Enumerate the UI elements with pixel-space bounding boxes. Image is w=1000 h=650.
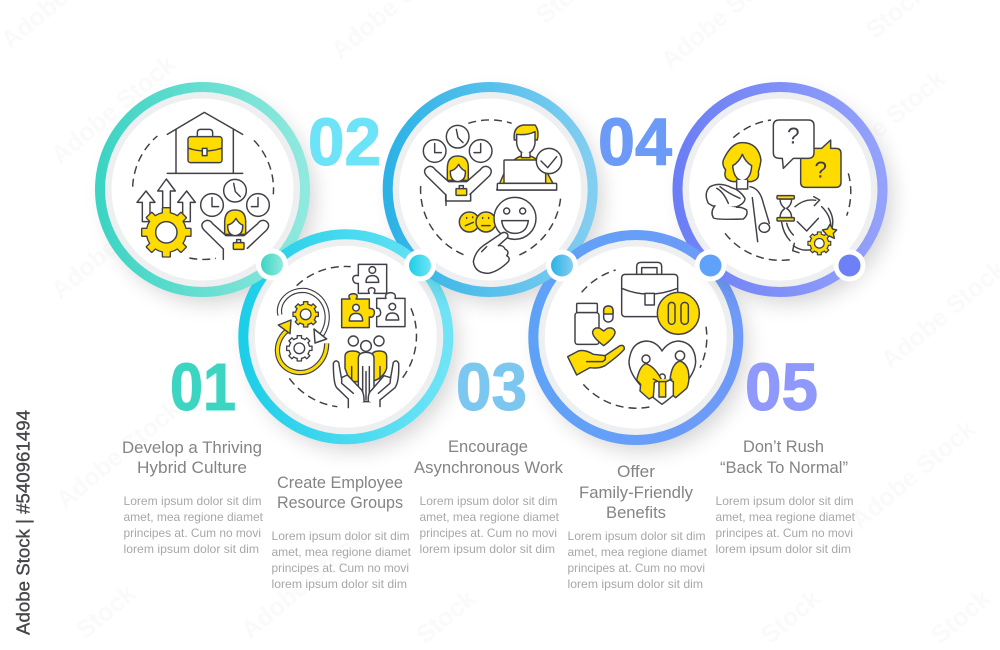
body text 5: principes at. Cum no movi (716, 526, 853, 540)
heading 4 (579, 462, 693, 522)
body text 2: amet, mea regione diamet (272, 545, 412, 559)
panel: circle 2 ring (243, 234, 457, 450)
panel: circle 5 ring (678, 87, 892, 303)
body text 2: principes at. Cum no movi (272, 561, 409, 575)
heading 4: Benefits (606, 503, 666, 522)
icon: back to normal (706, 120, 851, 260)
heading 5: Don’t Rush (743, 437, 824, 456)
stock id side label: Adobe Stock | #540961494 (14, 410, 34, 635)
body text 4 (568, 529, 708, 591)
body text 5 (716, 494, 856, 556)
body text 3: principes at. Cum no movi (420, 526, 557, 540)
heading 1: Hybrid Culture (137, 458, 247, 477)
heading 3 (414, 437, 563, 477)
body text 1: Lorem ipsum dolor sit dim (124, 494, 262, 508)
heading 2: Create Employee (277, 473, 403, 492)
connector dot 1 (256, 248, 288, 280)
heading 3: Encourage (448, 437, 528, 456)
body text 1: principes at. Cum no movi (124, 526, 261, 540)
body text 2 (272, 529, 412, 591)
heading 4: Family-Friendly (579, 483, 693, 502)
watermark pattern: Adobe Stock (816, 65, 951, 185)
heading 5 (720, 437, 848, 477)
connector dot 4 (694, 250, 726, 282)
watermark pattern: Adobe Stock (46, 50, 181, 170)
body text 4: principes at. Cum no movi (568, 561, 705, 575)
panel: circle 4 ring (533, 235, 747, 451)
body text 4: amet, mea regione diamet (568, 545, 708, 559)
heading 5: “Back To Normal” (720, 458, 848, 477)
body text 2: Lorem ipsum dolor sit dim (272, 529, 410, 543)
heading 4: Offer (617, 462, 655, 481)
icon: hybrid culture (133, 112, 274, 259)
icon: employee resource groups (277, 264, 417, 408)
panel: circle 1 ring (100, 87, 314, 303)
body text 2: lorem ipsum dolor sit dim (272, 577, 407, 591)
body text 4: lorem ipsum dolor sit dim (568, 577, 703, 591)
watermark pattern: Adobe Stock (51, 395, 186, 515)
body text 1: lorem ipsum dolor sit dim (124, 542, 259, 556)
connector dot 5 (834, 250, 866, 282)
panel: circle 3 ring (388, 87, 602, 303)
watermark pattern: Stock (756, 584, 826, 650)
number 03: 03 (456, 350, 527, 425)
heading 1 (122, 438, 262, 477)
body text 3: amet, mea regione diamet (420, 510, 560, 524)
heading 2: Resource Groups (277, 493, 403, 512)
heading 2 (277, 473, 403, 512)
watermark pattern: Stock (926, 584, 996, 650)
body text 4: Lorem ipsum dolor sit dim (568, 529, 706, 543)
body text 5: lorem ipsum dolor sit dim (716, 542, 851, 556)
body text 5: amet, mea regione diamet (716, 510, 856, 524)
body text 5: Lorem ipsum dolor sit dim (716, 494, 854, 508)
icon: back to normal: ? (814, 157, 827, 183)
connector dot 3 (546, 250, 578, 282)
number 04: 04 (598, 105, 672, 180)
heading 1: Develop a Thriving (122, 438, 262, 457)
icon: back to normal: ? (787, 122, 800, 148)
number 01: 01 (170, 350, 236, 425)
number 02: 02 (308, 105, 381, 180)
watermark pattern: Adobe Stock (236, 525, 371, 645)
watermark pattern: Adobe Stock (846, 415, 981, 535)
heading 3: Asynchronous Work (414, 458, 563, 477)
number 05: 05 (745, 350, 818, 425)
icon: family friendly benefits (568, 262, 707, 408)
watermark pattern: Stock (411, 584, 481, 650)
body text 3: lorem ipsum dolor sit dim (420, 542, 555, 556)
body text 1: amet, mea regione diamet (124, 510, 264, 524)
body text 3: Lorem ipsum dolor sit dim (420, 494, 558, 508)
body text 3 (420, 494, 560, 556)
watermark pattern: Stock (71, 579, 141, 645)
body text 1 (124, 494, 264, 556)
icon: asynchronous work (421, 120, 562, 273)
connector dot 2 (404, 250, 436, 282)
watermark pattern: Adobe Stock (46, 185, 181, 305)
